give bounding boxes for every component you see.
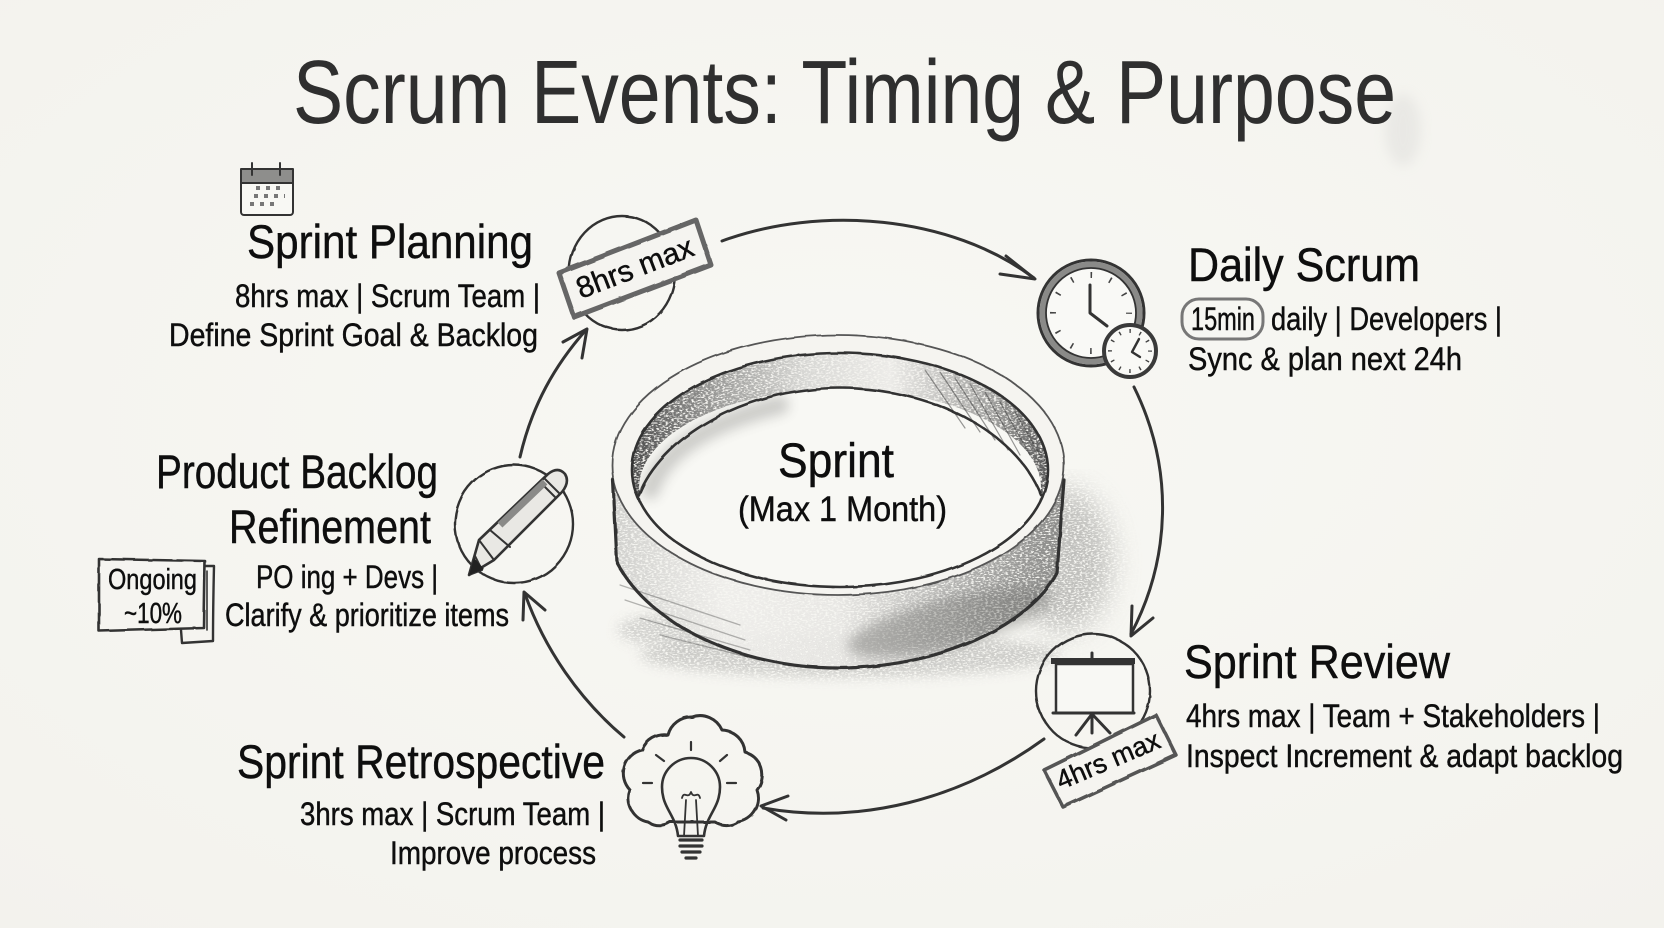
ring rim — [612, 335, 1064, 595]
icon: circle with projector screen — [1036, 634, 1150, 748]
details line 1: PO ing + Devs | — [256, 559, 438, 595]
panel: sprint planning — [169, 163, 711, 353]
title: Scrum Events: Timing & Purpose — [293, 43, 1396, 143]
arrow: planning to daily — [722, 220, 1035, 279]
note: ongoing 10 percent: ~10% — [124, 598, 182, 630]
central sprint ring — [612, 335, 1112, 677]
heading: Sprint Planning — [247, 215, 533, 268]
heading: Sprint Retrospective — [237, 735, 605, 788]
tag: 8hrs max: 8hrs max — [572, 231, 698, 306]
details line 2: Improve process — [390, 835, 596, 871]
icon: circle behind tag — [569, 216, 675, 330]
details line 1: daily | Developers | — [1271, 301, 1502, 337]
details line 1: 4hrs max | Team + Stakeholders | — [1186, 698, 1600, 734]
details line 2: Sync & plan next 24h — [1188, 341, 1462, 377]
heading: Daily Scrum — [1188, 238, 1420, 291]
highlight: 15min: 15min — [1191, 301, 1255, 337]
panel: sprint review — [1036, 634, 1623, 807]
note: ongoing 10 percent: Ongoing — [108, 564, 197, 596]
heading line 1: Product Backlog — [156, 445, 438, 498]
ring label: Sprint — [778, 435, 894, 488]
ring floor — [639, 389, 1041, 587]
ring floor soft shading — [650, 405, 780, 490]
details line 1: 8hrs max | Scrum Team | — [235, 278, 540, 314]
tag: 4hrs max — [1044, 715, 1176, 807]
details line 2: Define Sprint Goal & Backlog — [169, 317, 538, 353]
heading: Sprint Review — [1184, 635, 1451, 688]
details line 1: 3hrs max | Scrum Team | — [300, 796, 605, 832]
ring outlines — [612, 335, 1064, 668]
arrow: review to retrospective — [761, 739, 1044, 820]
ring sublabel: (Max 1 Month) — [738, 490, 947, 529]
details line 2: Inspect Increment & adapt backlog — [1186, 738, 1623, 774]
ring dark shading on front wall — [842, 573, 1058, 671]
ring inner wall — [632, 353, 1048, 587]
ring ground shadow — [618, 488, 1112, 677]
details line 2: Clarify & prioritize items — [225, 597, 509, 633]
icon: circle with pencil — [455, 465, 573, 583]
arrow: daily to review — [1131, 387, 1163, 636]
icon: calendar — [241, 163, 293, 215]
arrow: backlog to planning — [520, 329, 587, 457]
tag: 4hrs max: 4hrs max — [1052, 725, 1165, 796]
ring hatching — [620, 370, 1040, 660]
tag: 8hrs max — [559, 220, 711, 317]
ring outer body — [613, 465, 1064, 668]
icon: lightbulb in cloud — [623, 716, 762, 858]
note: ongoing 10 percent — [99, 559, 214, 643]
icon: clocks — [1038, 260, 1156, 377]
arrow: retrospective to backlog — [523, 592, 624, 737]
panel: product backlog refinement — [99, 445, 573, 643]
panel: daily scrum — [1038, 238, 1502, 377]
panel: sprint retrospective — [237, 716, 762, 871]
heading line 2: Refinement — [229, 500, 431, 553]
highlight: 15min — [1182, 299, 1263, 339]
smudge near title — [1385, 94, 1421, 166]
